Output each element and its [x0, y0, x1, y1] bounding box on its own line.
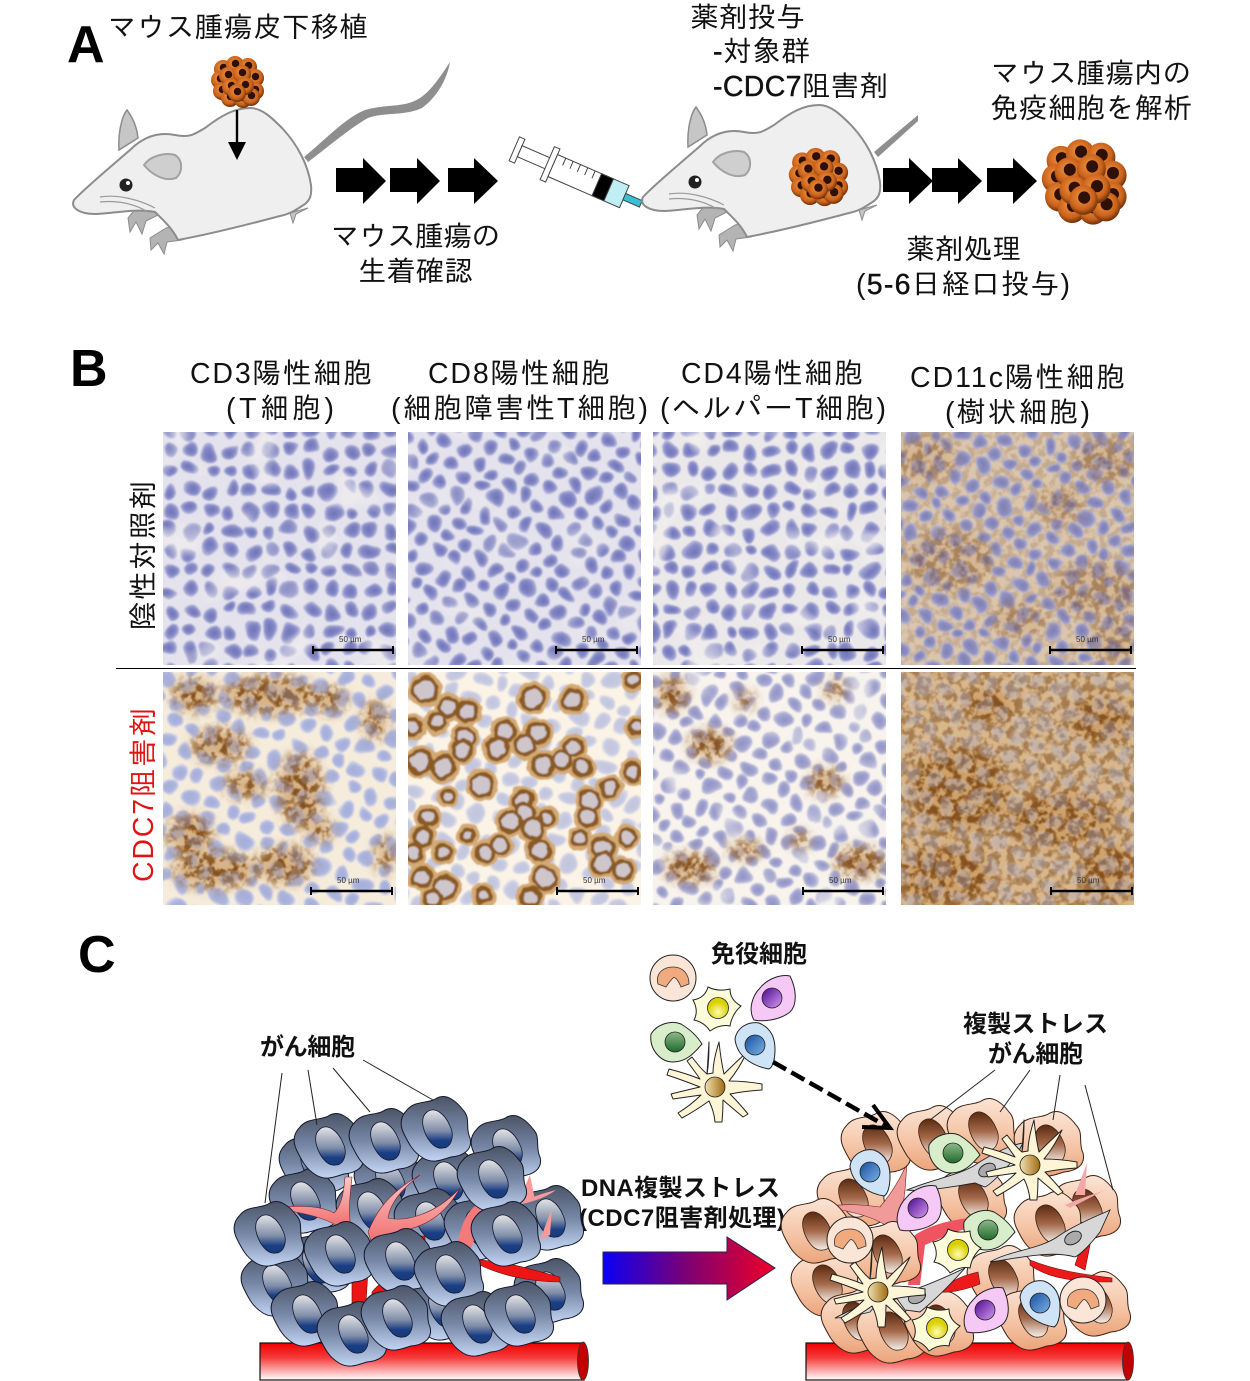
micrograph: control CD3: 50 µm: [339, 635, 362, 644]
label: immune analysis: [990, 58, 1192, 125]
micrograph: control CD11c: [901, 432, 1134, 665]
column header: CD3: [190, 358, 372, 425]
label: immune analysis: マウス腫瘍内の: [991, 58, 1191, 90]
label: DNA replication stress: [579, 1175, 785, 1232]
micrograph: control CD8: 50 µm: [582, 635, 605, 644]
icon: mouse 1: [73, 108, 311, 254]
icon: syringe: [507, 132, 648, 220]
label: engraftment confirmation: [331, 221, 500, 288]
row label: CDC7 inhibitor: CDC7阻害剤: [128, 708, 160, 882]
arrow: implantation down: [228, 110, 246, 160]
micrograph: CDC7 inhibitor CD3: 50 µm: [337, 876, 360, 885]
label: engraftment confirmation: マウス腫瘍の: [331, 221, 500, 253]
micrograph: CDC7 inhibitor CD11c: [901, 672, 1134, 905]
icon: extracted tumour: [1042, 139, 1127, 225]
panel letter C: C: [78, 926, 116, 984]
label: replication-stressed cancer cells: 複製ストレス: [963, 1011, 1108, 1038]
icon: implanted tumour: [211, 56, 264, 108]
icon: mouse tail 1: [304, 62, 450, 162]
label: engraftment confirmation: 生着確認: [358, 256, 473, 288]
label: tumour implantation: マウス腫瘍皮下移植: [108, 12, 368, 44]
panel B: immunostaining micrographs: [70, 340, 1160, 930]
column header: CD3: (T細胞): [226, 393, 334, 425]
label: drug treatment: (5-6日経口投与): [856, 269, 1070, 301]
arrow: immune cell infiltration dashed: [773, 1062, 890, 1128]
micrograph: CDC7 inhibitor CD8: [408, 672, 641, 905]
label: drug treatment: 薬剤処理: [906, 234, 1021, 266]
column header: CD11c: CD11c陽性細胞: [910, 362, 1125, 394]
label: immune analysis: 免疫細胞を解析: [990, 93, 1192, 125]
label: drug dosing: -対象群: [713, 36, 810, 68]
micrograph: control CD4: 50 µm: [828, 635, 851, 644]
fibroblasts: [835, 1143, 1110, 1318]
label: replication-stressed cancer cells: [963, 1011, 1108, 1068]
panel letter B: B: [70, 340, 108, 398]
label: DNA replication stress: DNA複製ストレス: [581, 1175, 780, 1202]
micrograph: control CD3: [163, 432, 396, 665]
micrograph: CDC7 inhibitor CD8: 50 µm: [583, 876, 606, 885]
cancer cell cluster (before treatment): [234, 1097, 584, 1366]
blood vessel right: [806, 1342, 1134, 1380]
micrograph: control CD8: [408, 432, 641, 665]
micrograph: control CD11c: 50 µm: [1076, 635, 1099, 644]
arrows: three block arrows to analysis: [883, 158, 1037, 204]
column header: CD4: (ヘルパーT細胞): [660, 393, 886, 425]
leader lines: cancer cells: [265, 1060, 433, 1203]
arrows: three block arrows to engraftment: [336, 158, 498, 204]
label: drug dosing: 薬剤投与: [690, 2, 805, 34]
icon: mouse 2: [642, 105, 880, 251]
column header: CD8: (細胞障害性T細胞): [391, 393, 648, 425]
column header: CD11c: (樹状細胞): [945, 397, 1090, 429]
column header: CD3: CD3陽性細胞: [190, 358, 372, 390]
micrograph: control CD4: [653, 432, 886, 665]
blood vessel left: [260, 1342, 588, 1380]
micrograph: CDC7 inhibitor CD4: 50 µm: [829, 876, 852, 885]
label: immune cells: 免役細胞: [711, 941, 807, 968]
panel C: model of replication stress and immune infiltration: [78, 926, 1134, 1380]
column header: CD4: [660, 358, 886, 425]
micrograph: CDC7 inhibitor CD3: [163, 672, 396, 905]
label: drug dosing: -CDC7阻害剤: [713, 71, 888, 103]
column header: CD8: [391, 358, 648, 425]
micrograph: CDC7 inhibitor CD11c: 50 µm: [1077, 876, 1100, 885]
free immune cells: [650, 955, 795, 1122]
arrow: gradient transition: [603, 1237, 775, 1300]
label: replication-stressed cancer cells: がん細胞: [988, 1040, 1083, 1068]
micrograph: CDC7 inhibitor CD4: [653, 672, 886, 905]
column header: CD11c: [910, 362, 1125, 429]
label: drug treatment: [856, 234, 1070, 301]
panel letter A: A: [67, 16, 105, 74]
column header: CD4: CD4陽性細胞: [681, 358, 863, 390]
row label: negative control: 陰性対照剤: [128, 481, 160, 630]
icon: mouse tail 2: [874, 115, 918, 157]
label: DNA replication stress: (CDC7阻害剤処理): [579, 1205, 785, 1232]
leader lines: stressed cancer cells: [930, 1070, 1113, 1190]
stressed cancer cell cluster with infiltrating immune cells: [781, 1099, 1131, 1363]
column header: CD8: CD8陽性細胞: [428, 358, 610, 390]
label: drug dosing: [690, 2, 888, 103]
label: cancer cells: がん細胞: [260, 1033, 355, 1061]
panel A: mouse experiment workflow: [67, 2, 1192, 301]
icon: tumour in mouse: [789, 148, 848, 206]
